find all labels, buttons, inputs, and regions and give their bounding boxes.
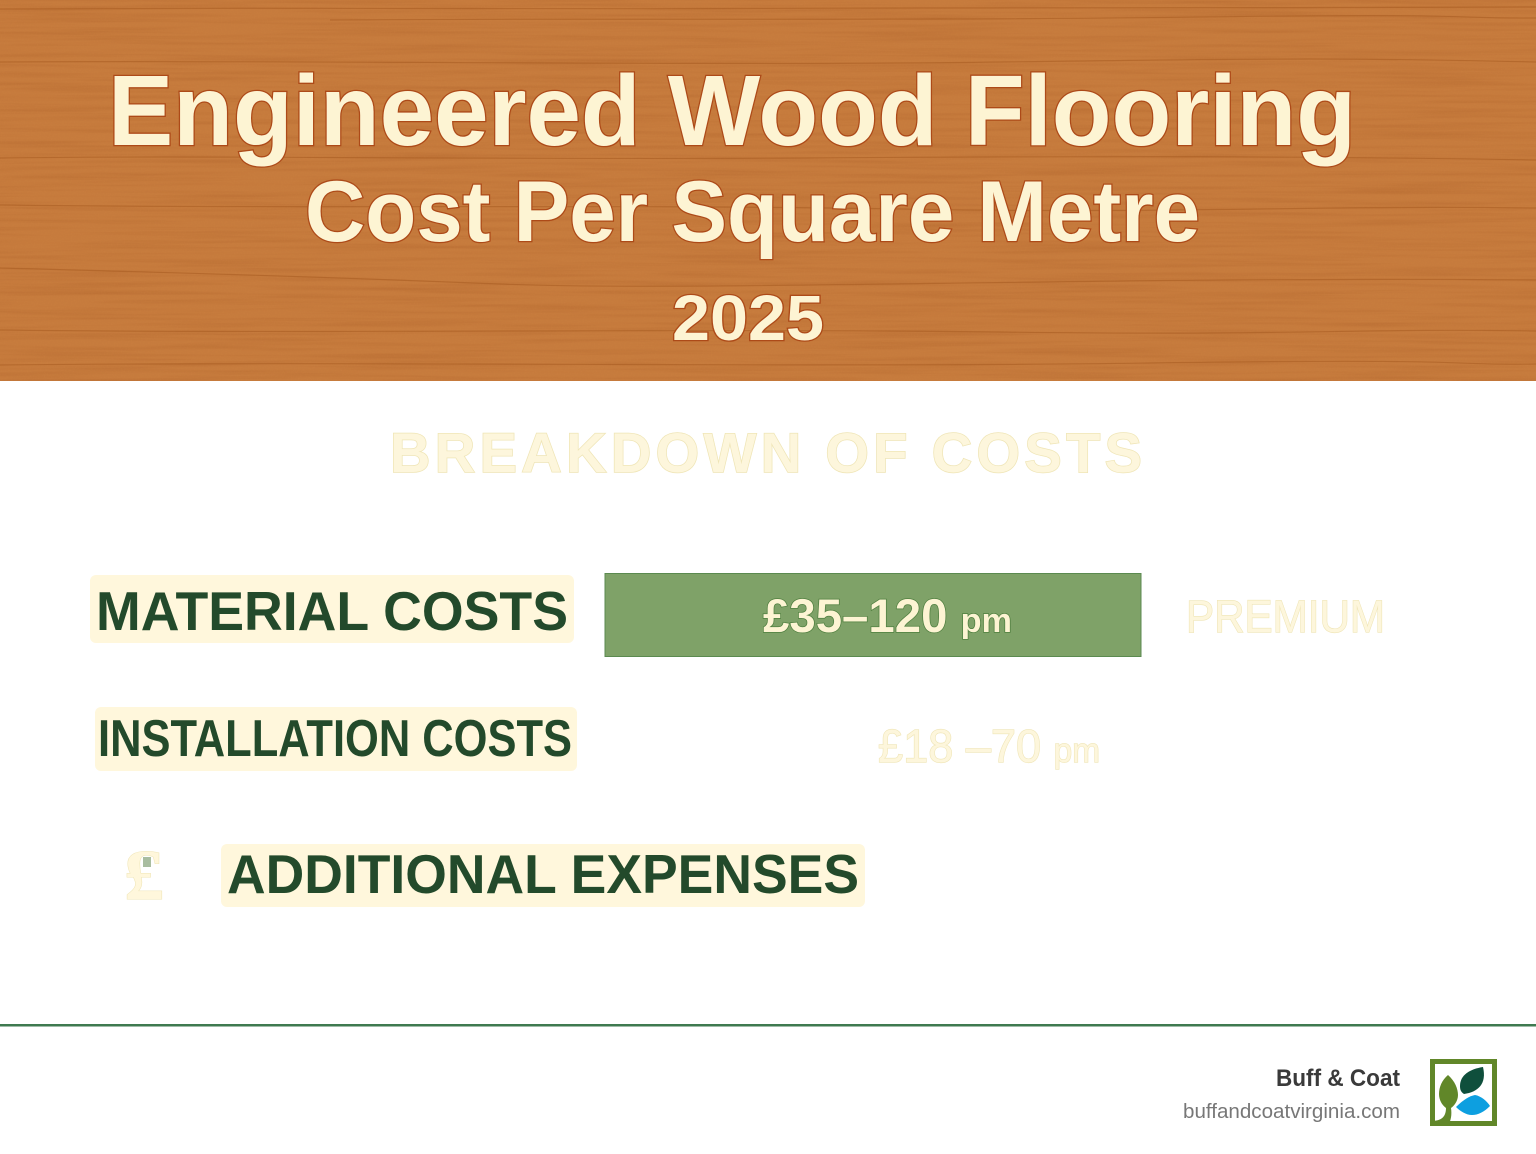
label: additional expenses: ADDITIONAL EXPENSES: [227, 843, 859, 905]
brand name: Buff & Coat: [1276, 1065, 1400, 1092]
title line 1: Engineered Wood Flooring: [108, 55, 1356, 167]
footer: brand: [1183, 1062, 1494, 1126]
bar: material price range: £35–120 pm: [763, 589, 1012, 642]
title: [108, 55, 1356, 354]
row: installation costs: [95, 707, 1100, 772]
bar: material price range: [605, 574, 1141, 656]
price: installation range: £18 –70 pm: [878, 720, 1100, 772]
icon: pound sign: £: [124, 835, 164, 915]
title line 2: Cost Per Square Metre: [305, 164, 1200, 260]
label: material costs: MATERIAL COSTS: [96, 580, 568, 642]
label: installation costs: INSTALLATION COSTS: [98, 710, 572, 768]
year: 2025: [672, 282, 824, 354]
row: additional expenses: [124, 835, 865, 915]
section heading: BREAKDOWN OF COSTS: [390, 421, 1142, 484]
brand url: buffandcoatvirginia.com: [1183, 1101, 1400, 1123]
header: wood banner: [0, 0, 1536, 381]
icon: logo: [1431, 1062, 1494, 1126]
row: material costs: [90, 574, 1385, 656]
tier label: premium: PREMIUM: [1186, 591, 1385, 642]
